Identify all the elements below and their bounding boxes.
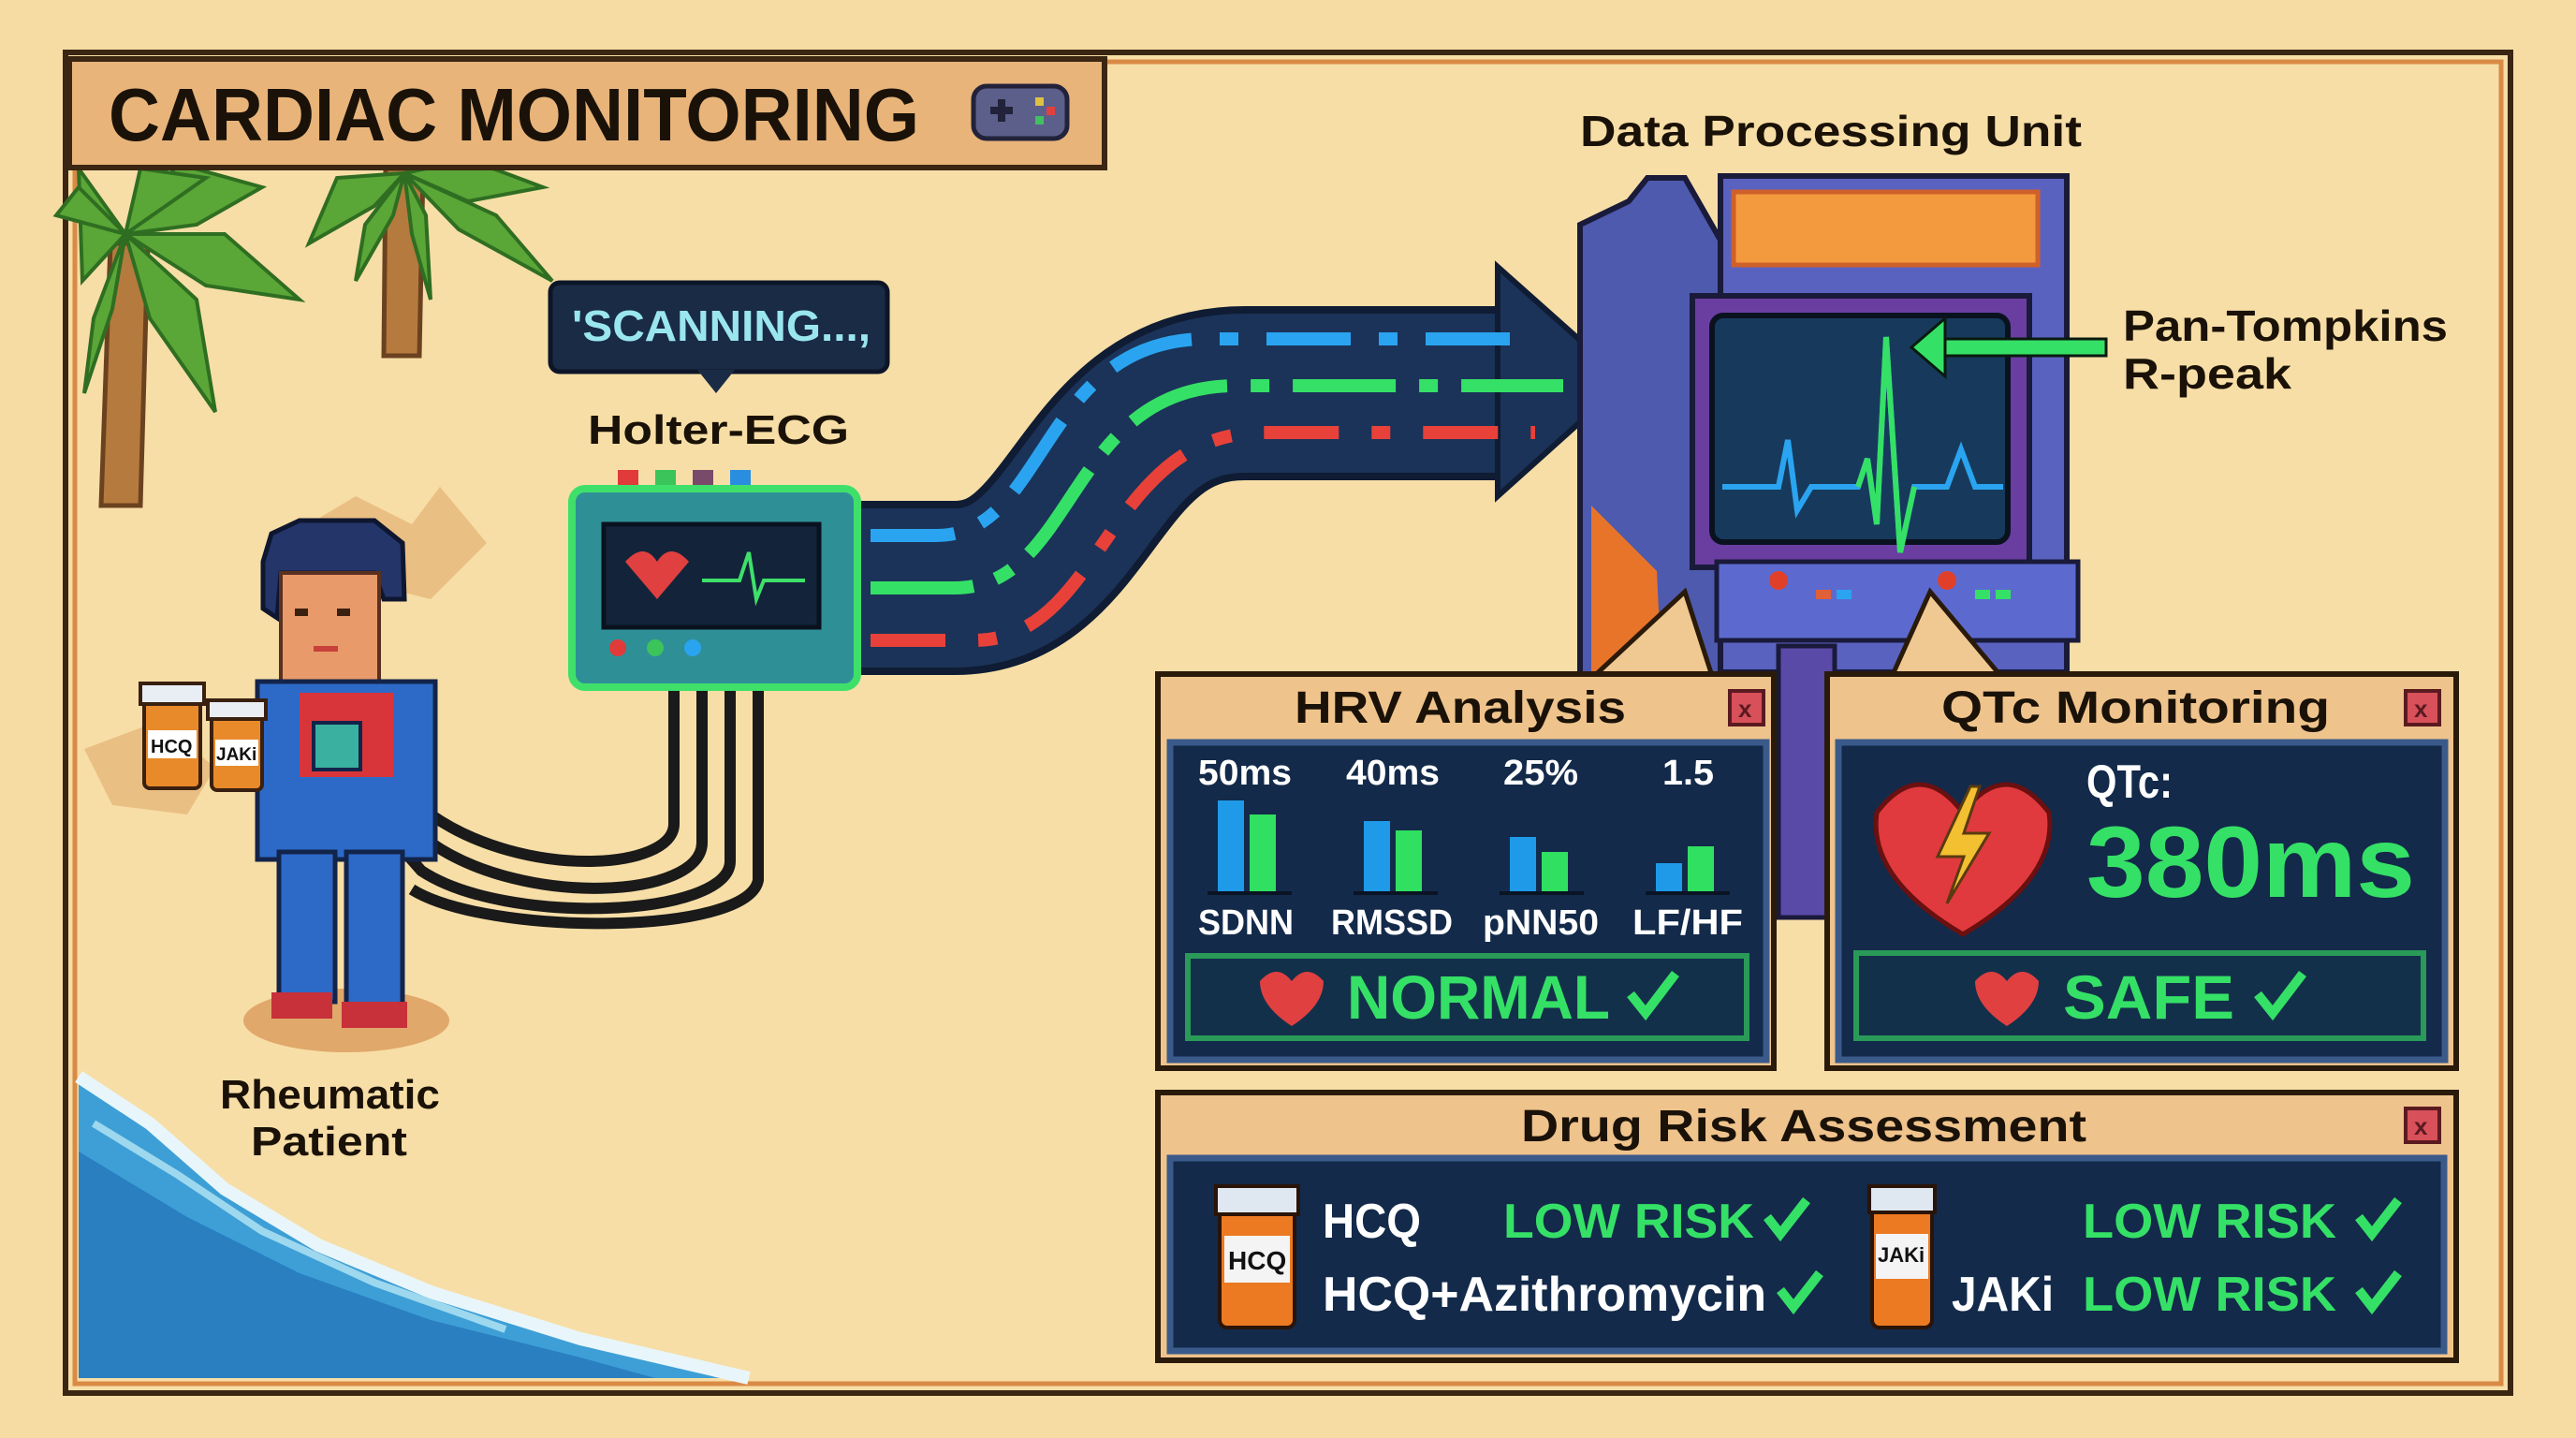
panel: Drug Risk Assessment: LOW RISK bbox=[1503, 1195, 1754, 1249]
label: Pan-Tompkins R-peak: Pan-Tompkins bbox=[2123, 301, 2448, 350]
bar chart bbox=[1198, 754, 1743, 943]
scanning speech bubble bbox=[550, 283, 887, 393]
panel: Drug Risk Assessment bbox=[1158, 1093, 2456, 1360]
close button bbox=[2406, 691, 2439, 725]
patient bbox=[140, 521, 449, 1052]
icon: JAKi bottle: JAKi bbox=[1878, 1243, 1925, 1267]
status: NORMAL bbox=[1188, 956, 1747, 1038]
bar chart: pNN50 bbox=[1483, 903, 1599, 943]
title tab bbox=[69, 59, 1105, 168]
arrow: R-peak pointer bbox=[1911, 318, 2106, 376]
status: NORMAL: NORMAL bbox=[1347, 962, 1610, 1032]
close button: x bbox=[2414, 695, 2428, 723]
panel: Drug Risk Assessment: HCQ bbox=[1323, 1195, 1421, 1249]
bar chart: 25% bbox=[1503, 754, 1578, 793]
bar chart: RMSSD bbox=[1331, 903, 1453, 943]
panel: QTc Monitoring: QTc: bbox=[2086, 756, 2173, 808]
close button: x bbox=[2414, 1112, 2428, 1140]
icon: HCQ bottle: HCQ bbox=[1228, 1246, 1286, 1275]
status: SAFE: SAFE bbox=[2063, 962, 2234, 1032]
label: Rheumatic Patient bbox=[220, 1072, 440, 1165]
panel: HRV Analysis bbox=[1158, 674, 1774, 1068]
icon: heart with bolt bbox=[1876, 785, 2050, 934]
icon: HCQ bottle bbox=[1216, 1186, 1298, 1328]
close button bbox=[2406, 1108, 2439, 1142]
panel: Drug Risk Assessment: Drug Risk Assessment bbox=[1521, 1102, 2086, 1152]
cables bbox=[356, 687, 758, 923]
panel: Drug Risk Assessment: HCQ+Azithromycin bbox=[1323, 1268, 1766, 1322]
data stream ribbon bbox=[857, 267, 1626, 640]
panel: Drug Risk Assessment: JAKi bbox=[1952, 1268, 2054, 1322]
icon: gamepad bbox=[973, 86, 1067, 139]
panel: Drug Risk Assessment: LOW RISK bbox=[2083, 1268, 2336, 1322]
panel: QTc Monitoring: 380ms bbox=[2086, 805, 2415, 918]
bar chart: SDNN bbox=[1198, 903, 1294, 943]
close button: x bbox=[1738, 695, 1752, 723]
panel: QTc Monitoring bbox=[1827, 674, 2456, 1068]
patient pill bottles bbox=[140, 683, 266, 790]
sand shadows bbox=[84, 487, 487, 814]
label: Data Processing Unit: Data Processing Unit bbox=[1580, 107, 2082, 155]
panel: HRV Analysis: HRV Analysis bbox=[1295, 683, 1626, 733]
title tab: CARDIAC MONITORING bbox=[109, 73, 919, 156]
close button bbox=[1730, 691, 1764, 725]
status: SAFE bbox=[1856, 953, 2423, 1038]
label: Pan-Tompkins R-peak bbox=[2123, 301, 2448, 398]
label: Rheumatic Patient: Rheumatic bbox=[220, 1072, 440, 1118]
icon: JAKi bottle bbox=[1869, 1186, 1935, 1328]
scanning speech bubble: 'SCANNING..., bbox=[572, 301, 871, 350]
patient pill bottles: HCQ bbox=[151, 737, 192, 757]
callout wedges bbox=[1591, 592, 2003, 679]
Holter device bbox=[572, 470, 857, 687]
patient pill bottles: JAKi bbox=[216, 745, 256, 765]
label: Rheumatic Patient: Patient bbox=[251, 1119, 407, 1165]
bar chart: 50ms bbox=[1198, 754, 1292, 793]
arcade cabinet bbox=[1580, 176, 2078, 922]
bar chart: 40ms bbox=[1346, 754, 1440, 793]
panel: Drug Risk Assessment: LOW RISK bbox=[2083, 1195, 2336, 1249]
bar chart: LF/HF bbox=[1632, 903, 1743, 943]
palm trees bbox=[56, 159, 552, 506]
panel: QTc Monitoring: QTc Monitoring bbox=[1941, 683, 2330, 733]
label: Holter-ECG: Holter-ECG bbox=[588, 407, 849, 453]
bar chart: 1.5 bbox=[1662, 754, 1714, 793]
sea bbox=[79, 1077, 749, 1378]
label: Pan-Tompkins R-peak: R-peak bbox=[2123, 349, 2291, 398]
